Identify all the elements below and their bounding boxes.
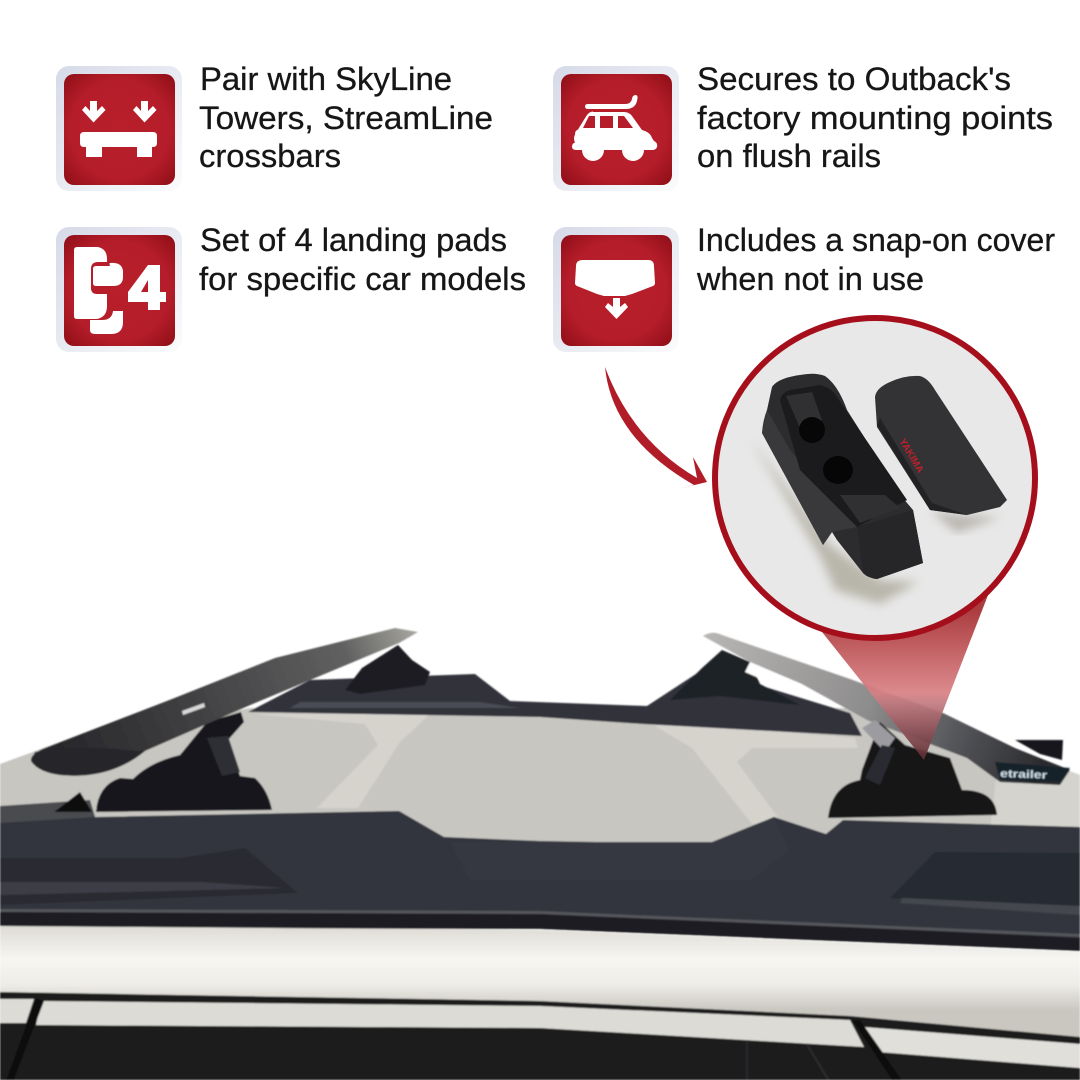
pad cavity — [780, 385, 907, 527]
far crossbar strut left — [255, 714, 430, 808]
text: pair with crossbars — [199, 61, 493, 174]
icon: set of 4 landing pads — [56, 227, 182, 352]
text: set of 4 pads: for specific car models — [199, 261, 526, 297]
text: factory mounting points: factory mounting points — [697, 100, 1053, 136]
window dark area — [0, 990, 1080, 1080]
text: set of 4 pads — [199, 222, 526, 297]
car roof photo illustration — [0, 628, 1080, 1080]
icon: crossbar pressing down onto tower — [56, 66, 182, 191]
far crossbar strut right — [645, 720, 858, 824]
text: factory mounting points: Secures to Outback's — [697, 61, 1011, 97]
silver body band — [0, 926, 1080, 1037]
etrailer label on bar — [995, 762, 1070, 782]
text: snap-on cover — [696, 222, 1055, 297]
text: snap-on cover: when not in use — [696, 261, 924, 297]
text: pair with crossbars: Pair with SkyLine — [200, 61, 452, 97]
text: set of 4 pads: Set of 4 landing pads — [200, 222, 507, 258]
shadows — [752, 440, 918, 604]
right crossbar — [703, 633, 1070, 785]
text: pair with crossbars: Towers, StreamLine — [199, 100, 493, 136]
circular detail: pad and cover — [715, 318, 1035, 638]
text: factory mounting points — [697, 61, 1053, 174]
roof panel — [0, 708, 1080, 870]
cover — [875, 376, 1007, 515]
far roof rail — [248, 670, 862, 736]
text: pair with crossbars: crossbars — [199, 138, 341, 174]
left tower — [96, 712, 272, 812]
icon: snap-on cover — [553, 227, 679, 352]
left crossbar — [31, 628, 418, 776]
near roof rail — [0, 800, 96, 825]
car roof photo illustration: etrailer — [1000, 768, 1048, 782]
text: factory mounting points: on flush rails — [697, 138, 881, 174]
callout cone pointing to tower — [822, 590, 990, 760]
landing pad body — [762, 374, 923, 579]
text: snap-on cover: Includes a snap-on cover — [697, 222, 1055, 258]
right tower — [828, 722, 997, 818]
chrome window strips — [0, 999, 864, 1047]
icon: car with crossbar — [553, 66, 679, 191]
YAKIMA logo: YAKIMA — [896, 437, 925, 475]
pad front face — [857, 510, 923, 579]
arrow to cover detail — [605, 367, 707, 489]
